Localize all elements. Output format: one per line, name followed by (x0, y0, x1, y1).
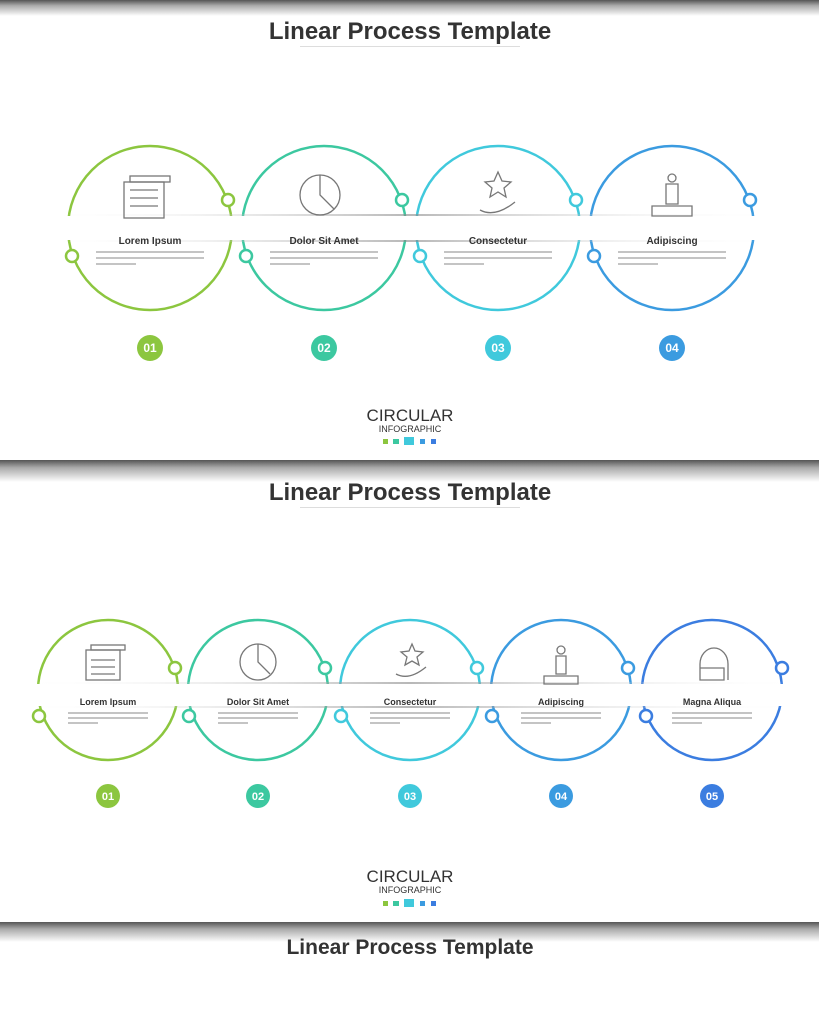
number badges top: 04 (665, 341, 679, 355)
number badges bottom: 01 (102, 791, 114, 803)
number badges top (137, 335, 685, 361)
step 2 circle (240, 146, 408, 310)
step 4 circle (486, 620, 634, 760)
step 3 circle (335, 620, 483, 760)
number badges bottom: 05 (706, 791, 718, 803)
number badges top: 02 (317, 341, 331, 355)
logo 2: INFOGRAPHIC (379, 885, 442, 895)
panel: 5-step process (33, 620, 788, 760)
title 2: Linear Process Template (269, 479, 551, 506)
icons bottom (86, 644, 728, 684)
step texts bottom: Consectetur (384, 697, 437, 707)
step 4 circle (588, 146, 756, 310)
logo 1 (367, 406, 453, 445)
step 3 circle (414, 146, 582, 310)
title 1: Linear Process Template (269, 18, 551, 45)
step 2 circle (183, 620, 331, 760)
logo 2: CIRCULAR (367, 867, 453, 886)
number badges bottom: 03 (404, 791, 416, 803)
step texts top: Adipiscing (646, 236, 698, 247)
icons top (124, 172, 692, 218)
step texts bottom: Lorem Ipsum (80, 697, 136, 707)
number badges bottom: 04 (555, 791, 568, 803)
middle shadow band (0, 460, 819, 482)
step texts bottom: Adipiscing (538, 697, 584, 707)
step 1 circle (66, 146, 234, 310)
step 5 circle (640, 620, 788, 760)
number badges top: 01 (143, 341, 157, 355)
logo 1: CIRCULAR (367, 406, 453, 425)
logo 2 (367, 867, 453, 907)
panel: 4-step process (66, 146, 756, 310)
step texts top: Lorem Ipsum (119, 236, 181, 247)
step texts bottom: Magna Aliqua (683, 697, 742, 707)
step texts bottom: Dolor Sit Amet (227, 697, 289, 707)
bottom shadow band (0, 922, 819, 942)
step texts top (119, 236, 698, 247)
top shadow band (0, 0, 819, 16)
title 3: Linear Process Template (286, 936, 534, 959)
step texts bottom (80, 697, 742, 707)
number badges bottom (96, 784, 724, 808)
logo 1: INFOGRAPHIC (379, 424, 442, 434)
number badges top: 03 (491, 341, 505, 355)
step texts top: Dolor Sit Amet (289, 236, 359, 247)
number badges bottom: 02 (252, 791, 264, 803)
step texts top: Consectetur (469, 236, 527, 247)
step 1 circle (33, 620, 181, 760)
